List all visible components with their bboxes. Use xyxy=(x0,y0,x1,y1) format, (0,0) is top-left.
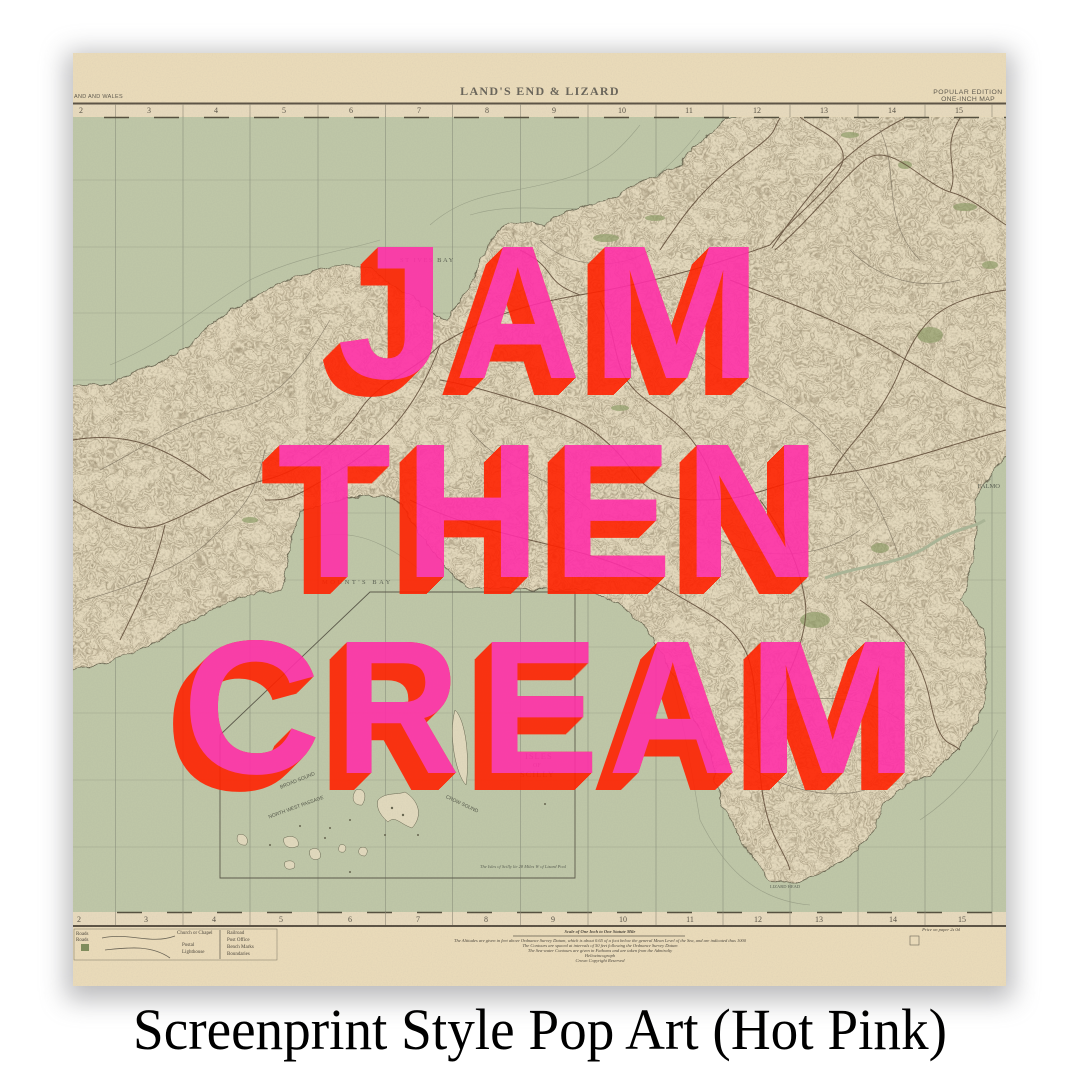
bottom grid strip: 4 xyxy=(212,915,216,924)
map scale notes xyxy=(454,929,747,963)
bottom grid strip: 10 xyxy=(619,915,627,924)
map legend: Post Office xyxy=(227,938,250,943)
word: JAM xyxy=(337,206,762,419)
map legend: Roads xyxy=(76,938,89,943)
map labels: ST IVES BAY xyxy=(400,257,455,264)
bottom grid strip: 12 xyxy=(754,915,762,924)
map top header xyxy=(73,84,1006,104)
map scale notes: The Sea-water Contours are given in Fathoms and are taken from the Admiralty xyxy=(528,948,672,953)
map labels: LIZARD HEAD xyxy=(770,884,801,889)
map legend: Bench Marks xyxy=(227,945,254,950)
bottom grid strip: 7 xyxy=(416,915,420,924)
top grid strip: 8 xyxy=(485,106,489,115)
map labels: MOUNT'S BAY xyxy=(322,579,393,586)
map title: LAND'S END & LIZARD xyxy=(460,84,620,98)
bottom grid strip: 3 xyxy=(144,915,148,924)
map top header: ONE-INCH MAP xyxy=(941,96,995,103)
top grid strip xyxy=(73,104,1006,118)
bottom grid strip: 2 xyxy=(77,915,81,924)
top grid strip: 13 xyxy=(820,106,828,115)
top grid strip: 5 xyxy=(282,106,286,115)
word: JAM: A xyxy=(455,206,581,419)
map labels xyxy=(322,257,1000,889)
map legend: Roads xyxy=(76,932,89,937)
top grid strip: 11 xyxy=(685,106,693,115)
bottom grid strip xyxy=(73,912,1006,927)
scilly islands xyxy=(237,710,468,869)
map labels: OF xyxy=(533,763,541,769)
edition note: POPULAR EDITION xyxy=(933,89,1003,96)
sound labels: BROAD SOUND xyxy=(279,771,316,791)
bottom grid strip: 6 xyxy=(348,915,352,924)
word: THEN xyxy=(277,404,821,619)
sound labels: NORTH WEST PASSAGE xyxy=(268,795,325,820)
scilly dots xyxy=(269,803,546,873)
river estuary xyxy=(825,520,985,578)
word: CREAM xyxy=(182,600,918,814)
top grid strip: 14 xyxy=(888,106,896,115)
paper grain xyxy=(73,53,1006,986)
top grid strip: 12 xyxy=(753,106,761,115)
sea depth contours xyxy=(110,125,998,905)
word: CREAM: R xyxy=(335,600,460,814)
map scale notes: Scale of One Inch to One Statute Mile xyxy=(565,929,635,934)
sound labels: CROW SOUND xyxy=(445,794,479,815)
word: JAM: M xyxy=(591,206,762,419)
map scale notes: Heliozincograph xyxy=(584,953,616,958)
map labels: SCILLY xyxy=(520,769,555,779)
map labels: FALMO xyxy=(978,483,1000,490)
word: THEN: T xyxy=(277,405,391,619)
sea xyxy=(73,117,1006,912)
map legend: Railroad xyxy=(227,931,245,936)
map legend: Boundaries xyxy=(227,952,250,957)
bottom grid strip: 9 xyxy=(551,915,555,924)
sea grid xyxy=(73,104,1006,926)
map paper xyxy=(73,53,1006,986)
magnetic north note: Price on paper 2s 0d xyxy=(921,927,961,932)
panel: vintage map xyxy=(60,53,1020,986)
top grid strip: 7 xyxy=(417,106,421,115)
map labels: ISLES xyxy=(525,751,553,761)
map scale notes: Crown Copyright Reserved xyxy=(575,958,625,963)
top grid strip: 2 xyxy=(79,106,83,115)
land xyxy=(60,105,1020,905)
word: CREAM: E xyxy=(480,602,599,814)
left edge note: AND AND WALES xyxy=(74,94,123,100)
top grid strip: 15 xyxy=(955,106,963,115)
roads and railway xyxy=(73,117,1006,870)
top grid strip: 3 xyxy=(147,106,151,115)
bottom grid strip: 11 xyxy=(686,915,694,924)
sound labels xyxy=(268,771,479,820)
top grid strip: 10 xyxy=(618,106,626,115)
magnetic north note xyxy=(910,927,961,945)
map labels: The Isles of Scilly lie 28 Miles W of Lizard Pool xyxy=(480,864,567,869)
top grid strip: 6 xyxy=(349,106,353,115)
word: THEN: E xyxy=(553,404,672,618)
top grid strip: 4 xyxy=(214,106,218,115)
word: CREAM: M xyxy=(747,601,918,814)
map legend: Lighthouse xyxy=(182,950,205,955)
word: JAM: J xyxy=(337,207,446,419)
bottom grid strip: 8 xyxy=(484,915,488,924)
bottom grid strip: 5 xyxy=(279,915,283,924)
map shadow xyxy=(66,52,1013,1000)
map scale notes: The Contours are spaced at intervals of 50 feet following the Ordnance Survey Datum xyxy=(522,943,678,948)
bottom grid strip: 15 xyxy=(958,915,966,924)
word: THEN: N xyxy=(684,404,821,618)
title: jam then cream xyxy=(182,206,918,814)
map legend: Church or Chapel xyxy=(177,931,213,936)
caption: Screenprint Style Pop Art (Hot Pink) xyxy=(133,997,947,1062)
word: CREAM: C xyxy=(182,601,321,814)
top grid strip: 9 xyxy=(552,106,556,115)
map scale notes: The Altitudes are given in feet above Ordnance Survey Datum, which is about 0.65 of a foot below the general Mean Level of the Sea, and are indicated thus 1000 xyxy=(454,938,747,944)
word: THEN: H xyxy=(404,404,541,618)
top rule xyxy=(73,102,1006,104)
word: CREAM: A xyxy=(608,602,738,814)
woodland patches xyxy=(242,132,998,628)
map legend: Postal xyxy=(182,943,195,948)
bottom grid strip: 13 xyxy=(815,915,823,924)
map legend xyxy=(74,929,277,960)
bottom grid strip: 14 xyxy=(889,915,897,924)
inset frame: isles of scilly xyxy=(220,592,575,878)
